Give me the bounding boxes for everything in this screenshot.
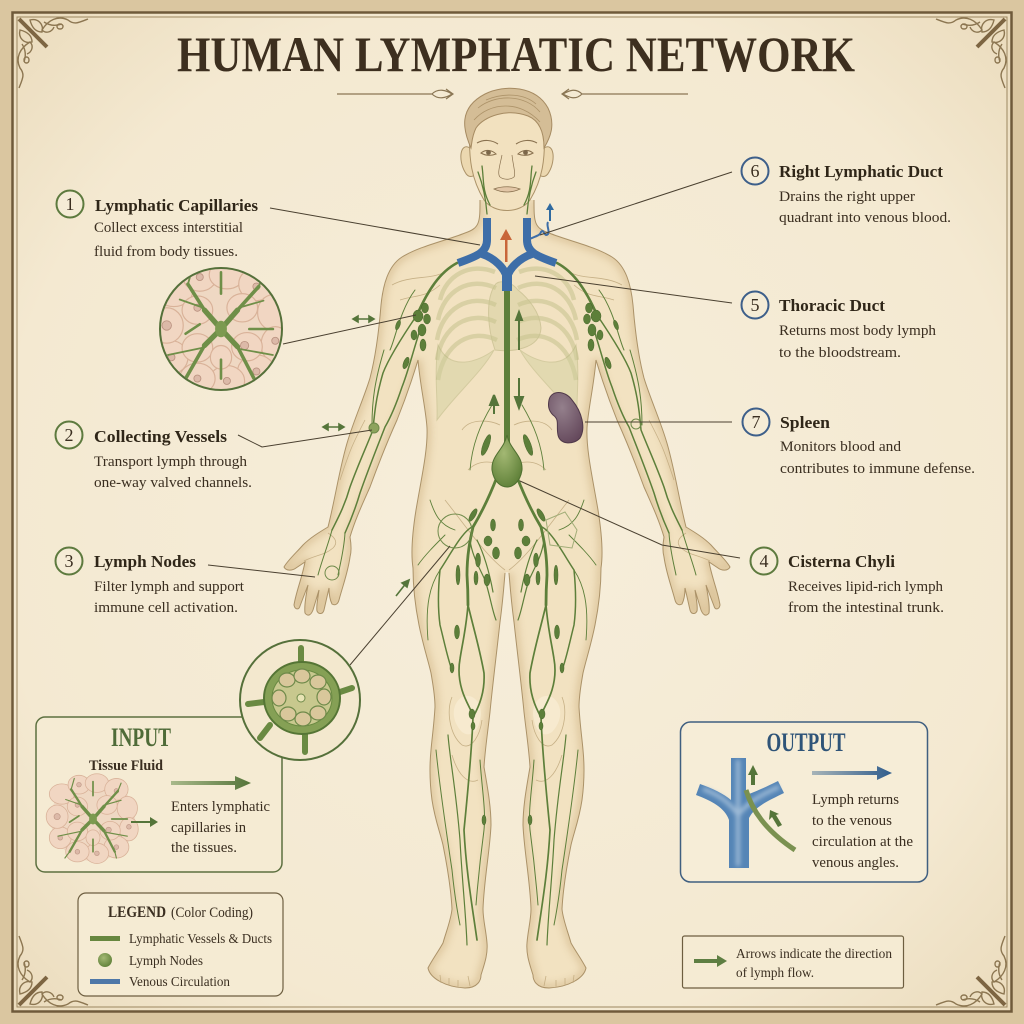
spleen — [548, 392, 583, 443]
label 1: lymphatic capillaries: Collect excess interstitial — [94, 220, 243, 236]
label 3: lymph nodes — [56, 548, 245, 616]
legend: Lymph Nodes — [129, 954, 203, 969]
label 7: spleen: contributes to immune defense. — [780, 461, 975, 477]
label 4: cisterna chyli — [750, 548, 944, 616]
label 7: spleen — [742, 408, 975, 477]
heart and lung outline — [489, 282, 541, 351]
label 4: cisterna chyli: Receives lipid-rich lymph — [788, 579, 943, 595]
panel: output: venous angles. — [812, 855, 899, 871]
label 4: cisterna chyli: 4 — [760, 551, 768, 571]
label 1: lymphatic capillaries: fluid from body tissues. — [94, 244, 238, 260]
panel: input — [36, 717, 282, 872]
label 5: thoracic duct: Thoracic Duct — [779, 296, 885, 315]
arrow: input flow — [171, 776, 251, 790]
body silhouette — [284, 200, 730, 988]
title: HUMAN LYMPHATIC NETWORK — [177, 26, 855, 82]
label 3: lymph nodes: 3 — [64, 551, 74, 571]
label 4: cisterna chyli: from the intestinal trunk. — [788, 600, 944, 616]
panel: input: INPUT — [111, 723, 171, 752]
thoracic duct and branches — [504, 288, 510, 448]
lymph vessels, ribs, nodes: right side — [509, 166, 710, 987]
note: arrow direction — [682, 936, 904, 988]
label 1: lymphatic capillaries: Lymphatic Capillaries — [95, 196, 258, 215]
label 7: spleen: Monitors blood and — [780, 439, 901, 455]
label 6: right lymphatic duct: quadrant into venous blood. — [779, 210, 951, 226]
panel: input: capillaries in — [171, 820, 246, 836]
panel: input: the tissues. — [171, 840, 237, 856]
label 3: lymph nodes: Lymph Nodes — [94, 552, 196, 571]
label 6: right lymphatic duct: Drains the right upper — [779, 189, 915, 205]
legend: venous swatch — [90, 979, 120, 984]
label 7: spleen: Spleen — [780, 413, 831, 432]
legend: node swatch — [98, 953, 112, 967]
label 6: right lymphatic duct: 6 — [750, 161, 760, 181]
label 1: lymphatic capillaries: 1 — [66, 194, 74, 214]
legend: vessels swatch — [90, 936, 120, 941]
head and face — [461, 88, 553, 210]
legend: Lymphatic Vessels & Ducts — [129, 932, 272, 947]
note: arrow direction: of lymph flow. — [736, 966, 814, 981]
label 7: spleen: 7 — [752, 412, 760, 432]
panel: output — [680, 722, 928, 882]
label 2: collecting vessels: one-way valved channels. — [94, 475, 252, 491]
label 2: collecting vessels: 2 — [64, 425, 74, 445]
leader lines — [208, 172, 740, 665]
venous angle: blue veins — [458, 218, 556, 291]
panel: input: Enters lymphatic — [171, 799, 270, 815]
label 3: lymph nodes: immune cell activation. — [94, 600, 238, 616]
lymph vessels, ribs, nodes: left side — [304, 166, 505, 987]
arrow: into capillaries — [131, 817, 158, 827]
label 4: cisterna chyli: Cisterna Chyli — [788, 552, 895, 571]
legend: (Color Coding) — [171, 905, 253, 921]
icon: tissue cell cluster — [46, 774, 138, 863]
label 5: thoracic duct: 5 — [750, 295, 760, 315]
panel: input: Tissue Fluid — [89, 758, 164, 774]
cisterna chyli — [492, 435, 522, 487]
label 2: collecting vessels: Collecting Vessels — [94, 427, 227, 446]
label 2: collecting vessels: Transport lymph through — [94, 454, 247, 470]
capillary detail inset — [159, 267, 283, 391]
label 2: collecting vessels — [56, 422, 252, 491]
title flourishes — [337, 89, 688, 99]
label 5: thoracic duct: Returns most body lymph — [779, 323, 937, 339]
legend: Venous Circulation — [129, 975, 230, 990]
label 3: lymph nodes: Filter lymph and support — [94, 579, 245, 595]
label 6: right lymphatic duct: Right Lymphatic Duct — [779, 162, 943, 181]
panel: output: OUTPUT — [766, 728, 846, 757]
lymph node detail inset — [240, 640, 360, 760]
outer flow arrows — [323, 316, 409, 596]
panel: output: to the venous — [812, 813, 892, 829]
node magnifier rings — [325, 419, 641, 580]
arrow: output flow — [812, 766, 892, 780]
label 5: thoracic duct — [742, 292, 937, 361]
legend — [78, 893, 283, 996]
icon: venous junction — [696, 758, 795, 868]
label 1: lymphatic capillaries — [56, 190, 258, 260]
label 5: thoracic duct: to the bloodstream. — [779, 345, 901, 361]
label 6: right lymphatic duct — [742, 158, 951, 226]
small flow arrows on the torso — [490, 312, 523, 414]
blue return arrow — [528, 203, 554, 240]
panel: output: Lymph returns — [812, 792, 899, 808]
panel: output: circulation at the — [812, 834, 913, 850]
orange lymph flow arrow — [500, 229, 512, 262]
legend: LEGEND — [108, 904, 166, 921]
human figure — [284, 88, 730, 988]
note: arrow direction: Arrows indicate the direction — [736, 947, 892, 962]
